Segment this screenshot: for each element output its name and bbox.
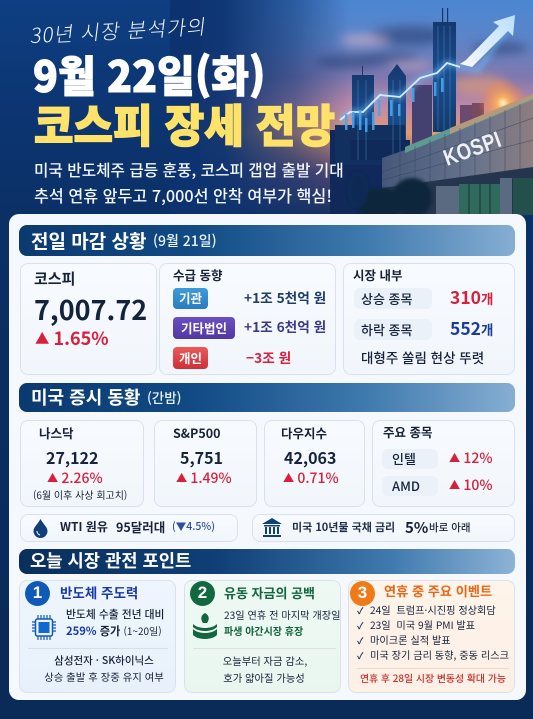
number badge 1 — [25, 581, 50, 606]
panel: point 1 semiconductors: 상승 출발 후 장중 유지 여부 — [44, 669, 164, 684]
panel: point 1 semiconductors — [19, 580, 176, 693]
event checklist: 마이크론 실적 발표 — [370, 632, 451, 647]
panel: Nasdaq: 나스닥 — [39, 423, 74, 442]
number badge 3: 3 — [358, 583, 367, 602]
panel: point 2 liquidity gap: 오늘부터 자금 감소, — [223, 653, 307, 668]
strip: US 10 year yield: 바로 아래 — [429, 520, 471, 535]
strip: WTI crude: 95달러대 — [116, 517, 165, 536]
panel: key stocks: ▲ 12% — [449, 448, 492, 468]
panel: market internals: 시장 내부 — [353, 265, 403, 284]
number badge 1: 1 — [33, 583, 42, 602]
panel: S&P500: S&P500 — [173, 423, 221, 442]
panel: point 2 liquidity gap: 유동 자금의 공백 — [224, 583, 315, 602]
panel: point 1 semiconductors: 반도체 수출 전년 대비 — [66, 606, 164, 622]
badge: institutions — [173, 288, 208, 309]
badge: other corporations — [173, 317, 235, 339]
section header: US stocks: (간밤) — [147, 387, 181, 407]
panel: market internals — [343, 263, 515, 375]
title main: 코스피 장세 전망 — [34, 90, 335, 156]
panel: S&P500: ▲ 1.49% — [176, 468, 232, 488]
header background: city skyline with KOSPI building: KOSPI — [440, 127, 505, 171]
badge: individuals — [173, 347, 208, 369]
panel: key stocks: 인텔 — [392, 449, 416, 468]
header description — [34, 158, 344, 207]
number badge 3 — [350, 581, 375, 606]
event checklist: ✓ — [357, 604, 364, 617]
panel: market internals: 310개 — [450, 285, 493, 310]
strip: WTI crude — [20, 514, 238, 542]
event checklist: ✓ — [357, 634, 364, 647]
panel: Nasdaq — [20, 420, 144, 507]
section header: previous close: (9월 21일) — [153, 231, 217, 251]
section header: today's points: 오늘 시장 관전 포인트 — [30, 547, 191, 573]
panel: supply and demand: +1조 6천억 원 — [244, 316, 326, 336]
strip: US 10 year yield — [252, 514, 515, 542]
panel: key stocks: AMD — [392, 476, 420, 495]
event checklist: 24일 트럼프·시진핑 정상회담 — [370, 602, 496, 617]
panel: key stocks: ▲ 10% — [449, 475, 492, 495]
panel: market internals: 552개 — [450, 316, 493, 341]
badge: individuals: 개인 — [179, 348, 202, 367]
strip: US 10 year yield: 5% — [405, 517, 428, 538]
strip: US 10 year yield: 미국 10년물 국채 금리 — [292, 519, 395, 535]
icon: oil drop — [34, 519, 48, 538]
panel: Nasdaq: ▲ 2.26% — [47, 468, 103, 488]
icon: money stack with leaf — [193, 613, 217, 639]
section header: previous close: 전일 마감 상황 — [31, 227, 147, 254]
panel: market internals: 상승 종목 — [361, 289, 412, 308]
title date: 9월 22일(화) — [33, 42, 265, 104]
panel: key stocks — [372, 420, 515, 507]
panel: supply and demand: 수급 동향 — [173, 265, 223, 284]
panel: supply and demand — [159, 263, 336, 375]
badge: other corporations: 기타법인 — [181, 318, 227, 337]
panel: market internals: 하락 종목 — [361, 320, 412, 339]
panel: Nasdaq: (6월 이후 사상 회고치) — [33, 487, 127, 502]
panel: Nasdaq: 27,122 — [46, 445, 98, 469]
panel: KOSPI: ▲ 1.65% — [35, 325, 109, 351]
panel: point 3 holiday events: 연휴 중 주요 이벤트 — [384, 581, 492, 600]
panel: KOSPI: 코스피 — [34, 268, 75, 289]
panel: point 1 semiconductors: 259% 증가 (1~20일) — [66, 623, 162, 639]
event checklist: 미국 장기 금리 동향, 중동 리스크 — [370, 647, 509, 662]
strip: WTI crude: WTI 원유 — [60, 518, 108, 535]
panel: point 2 liquidity gap: 파생 야간시장 휴장 — [224, 623, 303, 638]
panel: point 2 liquidity gap: 23일 연휴 전 마지막 개장일 — [224, 607, 340, 622]
main white panel — [9, 214, 526, 700]
section header: previous close — [19, 225, 515, 256]
icon: bank — [262, 518, 282, 537]
panel: point 3 holiday events: 연휴 후 28일 시장 변동성 확대 가능 — [360, 671, 506, 685]
KOSPI building — [382, 97, 533, 215]
panel: Dow: 42,063 — [284, 445, 336, 469]
event checklist: ✓ — [357, 619, 364, 632]
event checklist: 23일 미국 9월 PMI 발표 — [370, 617, 475, 632]
panel: supply and demand: +1조 5천억 원 — [244, 287, 326, 307]
panel: point 1 semiconductors: 삼성전자 · SK하이닉스 — [54, 653, 154, 668]
panel: S&P500 — [154, 420, 257, 507]
header description: 추석 연휴 앞두고 7,000선 안착 여부가 핵심! — [34, 183, 332, 207]
handwritten subtitle: 30년 시장 분석가의 — [29, 10, 209, 49]
number badge 2: 2 — [198, 583, 207, 602]
strip: WTI crude: (▼4.5%) — [172, 519, 215, 534]
icon: chip — [32, 615, 56, 640]
section header: today's points — [19, 549, 515, 574]
panel: S&P500: 5,751 — [180, 445, 223, 469]
badge: institutions: 기관 — [179, 288, 202, 307]
panel: point 3 holiday events — [348, 580, 515, 693]
event checklist: ✓ — [357, 649, 364, 662]
panel: point 2 liquidity gap — [184, 580, 341, 693]
header description: 미국 반도체주 급등 훈풍, 코스피 갭업 출발 기대 — [34, 158, 344, 181]
panel: market internals: 대형주 쏠림 현상 뚜렷 — [361, 347, 484, 367]
skyline — [335, 8, 484, 165]
rising chart line — [340, 30, 505, 120]
panel: KOSPI — [20, 263, 157, 375]
panel: point 2 liquidity gap: 호가 얇아질 가능성 — [223, 670, 305, 685]
panel: point 1 semiconductors: 반도체 주도력 — [60, 582, 138, 602]
panel: key stocks: 주요 종목 — [383, 422, 433, 441]
clouds — [316, 26, 528, 69]
panel: KOSPI: 7,007.72 — [34, 289, 147, 328]
event checklist — [357, 602, 509, 662]
panel: Dow: 다우지수 — [281, 423, 327, 442]
panel: Dow: ▲ 0.71% — [283, 468, 339, 488]
panel: Dow — [264, 420, 365, 507]
section header: US stocks: 미국 증시 동황 — [31, 384, 140, 410]
number badge 2 — [190, 581, 215, 606]
section header: US stocks — [19, 383, 515, 412]
panel: supply and demand: −3조 원 — [246, 347, 291, 367]
